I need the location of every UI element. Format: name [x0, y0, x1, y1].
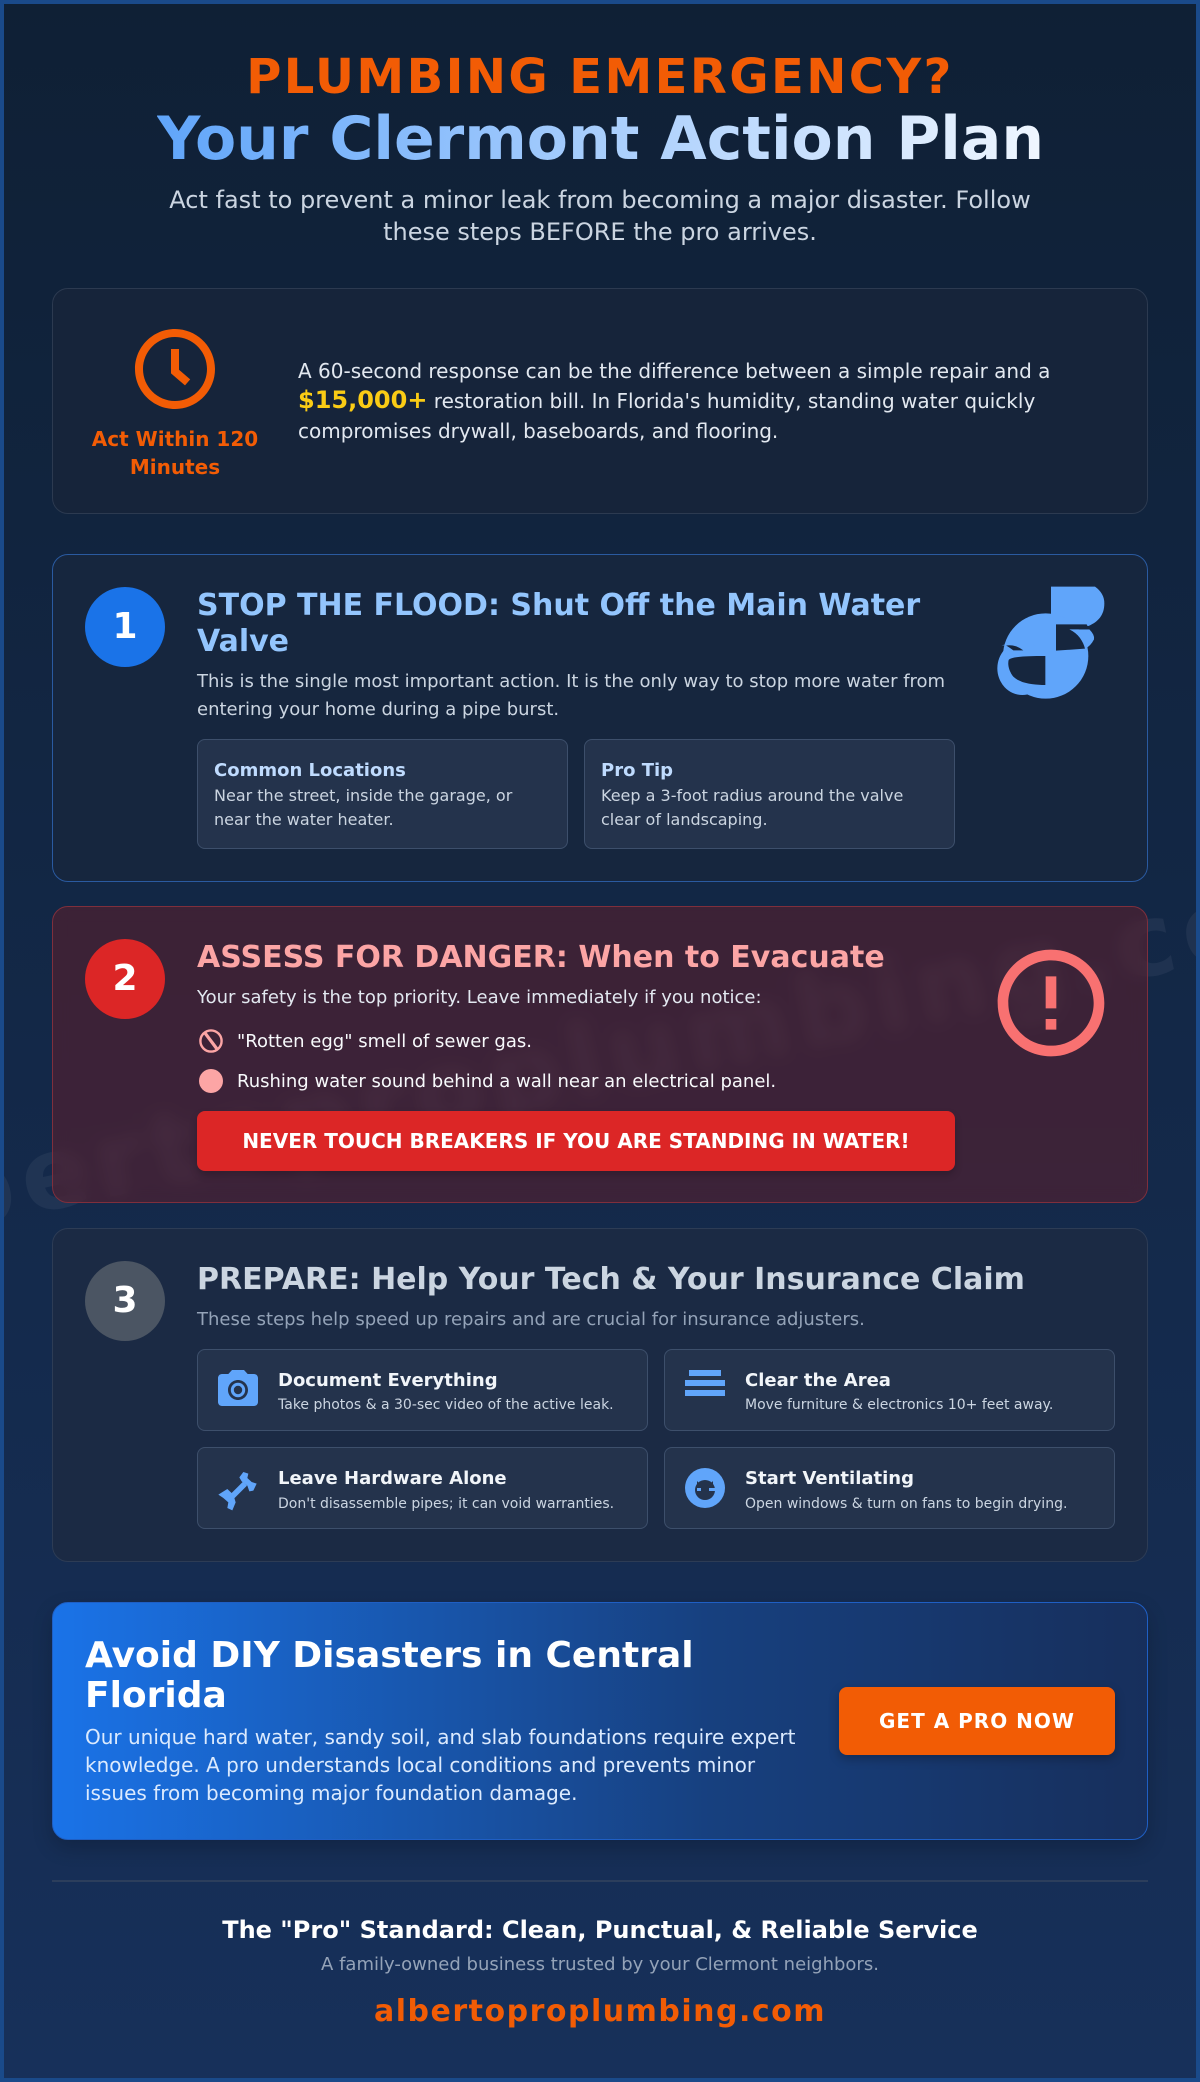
warning sign: sewer gas: "Rotten egg" smell of sewer gas. — [237, 1031, 532, 1052]
step number 1 — [85, 587, 165, 667]
cta text — [85, 1725, 795, 1805]
icon: clock — [134, 329, 215, 409]
label: act within: Minutes — [130, 455, 220, 479]
step 1 heading — [197, 588, 920, 659]
card title: Leave Hardware Alone — [278, 1468, 507, 1489]
label: act within — [92, 427, 258, 479]
card: clear the area — [664, 1349, 1115, 1431]
cta text: Our unique hard water, sandy soil, and slab foundations require expert — [85, 1725, 795, 1749]
title: action plan: Your Clermont Action Plan — [157, 104, 1044, 174]
cta heading — [85, 1635, 694, 1716]
hero text: compromises drywall, baseboards, and flooring. — [298, 419, 778, 443]
panel: act within 120 minutes — [52, 288, 1148, 514]
step 1 description: This is the single most important action. It is the only way to stop more water from — [197, 671, 945, 692]
cta heading: Florida — [85, 1675, 227, 1716]
card text — [214, 786, 512, 829]
website url: albertoproplumbing.com — [374, 1994, 826, 2029]
icon: bars — [685, 1370, 725, 1396]
title: plumbing emergency: PLUMBING EMERGENCY? — [246, 49, 954, 105]
step 1 description: entering your home during a pipe burst. — [197, 699, 559, 720]
panel: step 2 assess for danger — [52, 906, 1148, 1203]
subtitle: these steps BEFORE the pro arrives. — [383, 218, 817, 246]
panel: call to action — [52, 1602, 1148, 1840]
hero text: $15,000+ restoration bill. In Florida's humidity, standing water quickly — [298, 386, 1035, 414]
card: document everything — [197, 1349, 648, 1431]
step 3 description: These steps help speed up repairs and are crucial for insurance adjusters. — [197, 1309, 865, 1330]
step number 3: 3 — [112, 1280, 138, 1321]
cta heading: Avoid DIY Disasters in Central — [85, 1635, 694, 1676]
footer subtext: A family-owned business trusted by your Clermont neighbors. — [321, 1954, 879, 1975]
step 1 heading: STOP THE FLOOD: Shut Off the Main Water — [197, 588, 920, 623]
subtitle — [169, 186, 1031, 246]
card text: Open windows & turn on fans to begin drying. — [745, 1496, 1067, 1512]
step number 1: 1 — [112, 606, 138, 647]
icon: prohibited — [199, 1029, 223, 1053]
step 2 description: Your safety is the top priority. Leave immediately if you notice: — [197, 987, 762, 1008]
step 1 heading: Valve — [197, 624, 289, 659]
step 2 heading: ASSESS FOR DANGER: When to Evacuate — [197, 940, 885, 975]
footer heading: The "Pro" Standard: Clean, Punctual, & Reliable Service — [222, 1916, 978, 1944]
card text: Move furniture & electronics 10+ feet away. — [745, 1397, 1053, 1413]
card text: Take photos & a 30-sec video of the active leak. — [278, 1397, 614, 1413]
card text: clear of landscaping. — [601, 810, 768, 829]
step number 2: 2 — [112, 958, 138, 999]
panel: step 3 prepare — [52, 1228, 1148, 1562]
card title: Start Ventilating — [745, 1468, 914, 1489]
card text: Don't disassemble pipes; it can void warranties. — [278, 1496, 614, 1512]
step number 2 — [85, 939, 165, 1019]
card text: Near the street, inside the garage, or — [214, 786, 512, 805]
hero text — [298, 359, 1050, 443]
icon: exclamation — [998, 950, 1104, 1056]
card: pro tip — [584, 739, 955, 849]
step 1 description — [196, 671, 945, 720]
icon: filled dot — [199, 1069, 223, 1093]
cta button — [839, 1687, 1115, 1755]
header — [157, 49, 1044, 246]
card: start ventilating — [664, 1447, 1115, 1529]
label: act within: Act Within 120 — [92, 427, 258, 451]
step number 3 — [85, 1261, 165, 1341]
icon: wrench — [218, 1472, 257, 1510]
card text: Keep a 3-foot radius around the valve — [601, 786, 903, 805]
card: common locations — [197, 739, 568, 849]
card text — [601, 786, 903, 829]
panel: step 1 stop the flood — [52, 554, 1148, 882]
card text: near the water heater. — [214, 810, 394, 829]
subtitle: Act fast to prevent a minor leak from becoming a major disaster. Follow — [169, 186, 1031, 214]
icon: fan — [685, 1468, 725, 1508]
card title: Document Everything — [278, 1370, 498, 1391]
alert banner: NEVER TOUCH BREAKERS IF YOU ARE STANDING IN WATER! — [242, 1129, 910, 1153]
card title: Common Locations — [214, 760, 406, 781]
cta text: issues from becoming major foundation damage. — [85, 1781, 577, 1805]
hero text: A 60-second response can be the difference between a simple repair and a — [298, 359, 1050, 383]
card title: Pro Tip — [601, 760, 673, 781]
icon: camera — [218, 1370, 258, 1406]
cta button: GET A PRO NOW — [879, 1709, 1075, 1733]
cta text: knowledge. A pro understands local conditions and prevents minor — [85, 1753, 755, 1777]
card title: Clear the Area — [745, 1370, 891, 1391]
icon: valve — [997, 586, 1104, 699]
alert banner — [197, 1111, 955, 1171]
footer — [52, 1880, 1148, 2030]
warning sign: rushing water: Rushing water sound behind a wall near an electrical panel. — [237, 1071, 776, 1092]
step 3 heading: PREPARE: Help Your Tech & Your Insurance Claim — [197, 1262, 1025, 1297]
card: leave hardware alone — [197, 1447, 648, 1529]
